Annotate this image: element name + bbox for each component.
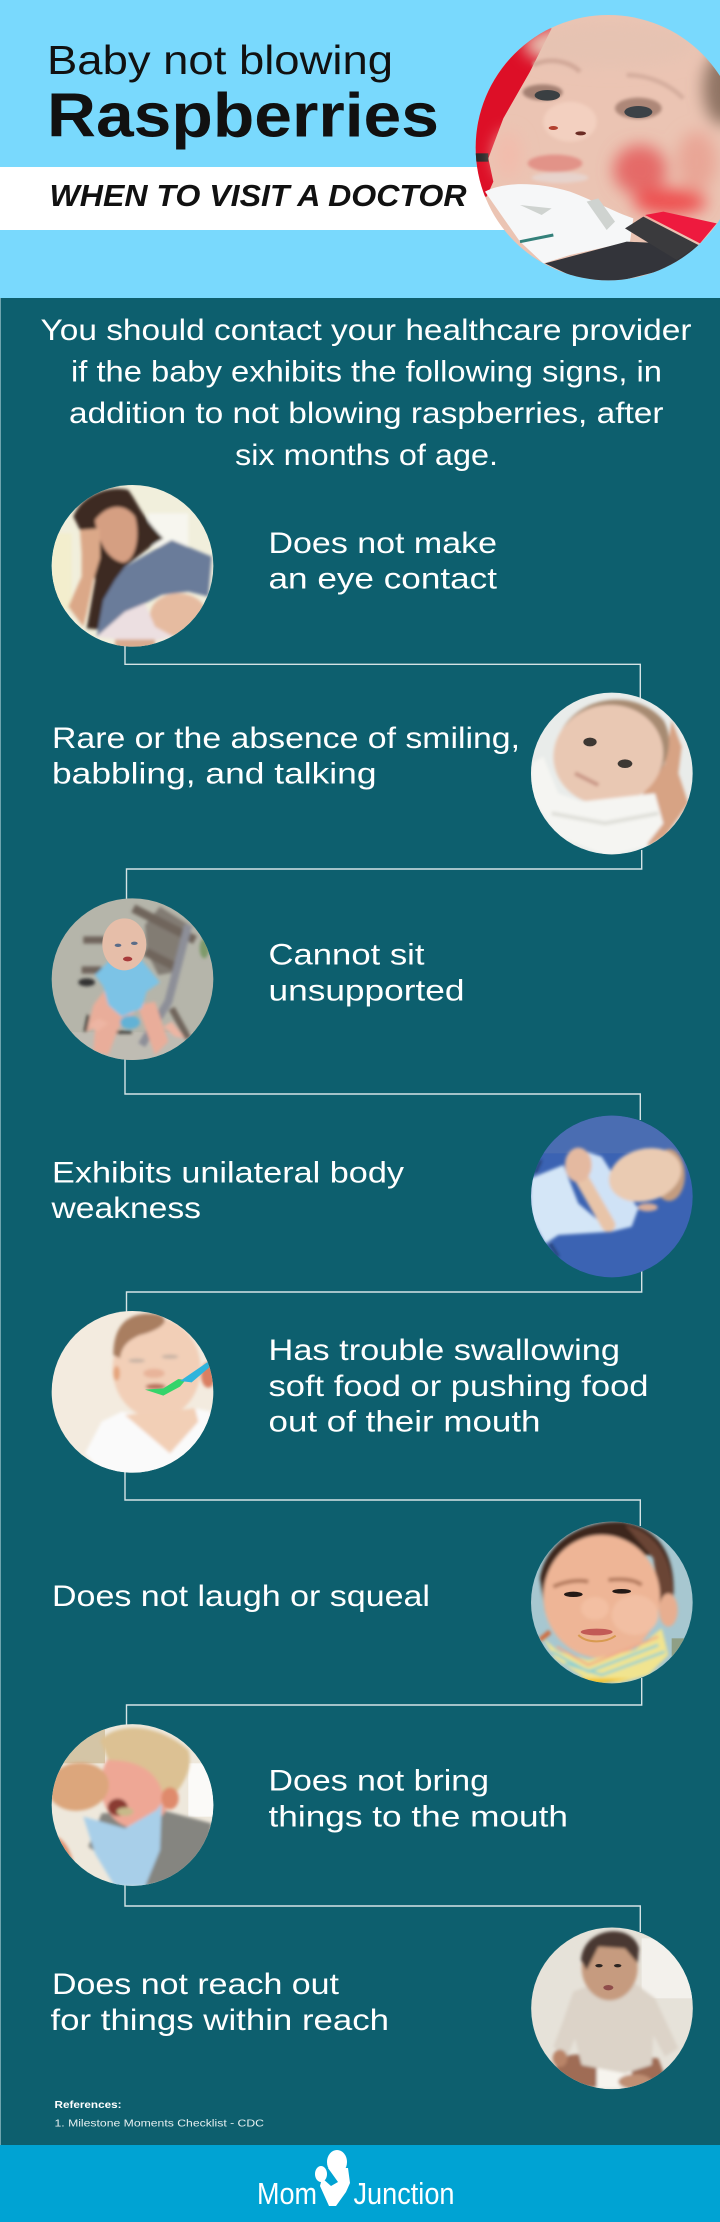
item 1 <box>45 480 497 655</box>
photo: tired mother holding baby <box>52 485 214 647</box>
text: Exhibits unilateral body <box>52 1156 404 1189</box>
text <box>268 527 497 596</box>
photo: newborn in white wrap <box>531 692 693 854</box>
subtitle: WHEN TO VISIT A DOCTOR <box>50 178 467 213</box>
photo: baby sitting in white bodysuit <box>531 1928 693 2090</box>
intro text: six months of age. <box>235 439 498 472</box>
text: Does not reach out <box>52 1968 339 2001</box>
references: References: <box>54 2099 122 2111</box>
white banner <box>0 167 560 230</box>
text: Does not bring <box>268 1765 489 1798</box>
text <box>50 1968 389 2037</box>
item 4 <box>50 1110 700 1285</box>
photo: toddler crying while fed <box>52 1724 214 1886</box>
logo: MomJunction <box>257 2150 454 2211</box>
footer bar <box>0 2145 720 2222</box>
text: Cannot sit <box>268 939 424 972</box>
title: Raspberries <box>47 82 439 151</box>
item 3 <box>45 895 464 1070</box>
text: babbling, and talking <box>52 758 376 791</box>
title <box>47 37 439 151</box>
text: Does not laugh or squeal <box>52 1580 430 1613</box>
item 8 <box>50 1925 702 2100</box>
text: Does not make <box>268 527 497 560</box>
intro text: You should contact your healthcare provider <box>40 314 691 347</box>
references <box>54 2099 264 2130</box>
photo: baby refusing spoon <box>52 1311 214 1473</box>
icon: mother and baby silhouette <box>315 2150 350 2206</box>
text: things to the mouth <box>268 1801 568 1834</box>
item 7 <box>45 1720 568 1895</box>
photo: baby lying on blue surface <box>531 1116 693 1278</box>
intro text: addition to not blowing raspberries, after <box>69 397 664 430</box>
text: weakness <box>50 1192 201 1225</box>
text: Rare or the absence of smiling, <box>52 722 520 755</box>
text: for things within reach <box>50 2004 389 2037</box>
logo: MomJunction: Junction <box>354 2176 454 2211</box>
photo: hero baby face <box>470 15 720 282</box>
intro text: if the baby exhibits the following signs, in <box>71 356 662 389</box>
text: an eye contact <box>268 563 497 596</box>
text <box>268 1765 568 1834</box>
text: out of their mouth <box>268 1406 540 1439</box>
item 5 <box>45 1305 648 1480</box>
text: Has trouble swallowing <box>268 1334 620 1367</box>
title: Baby not blowing <box>47 37 393 83</box>
header background <box>0 0 720 298</box>
photo: baby in blue onesie on chair <box>52 898 214 1060</box>
logo: MomJunction: Mom <box>257 2176 317 2211</box>
text: soft food or pushing food <box>268 1370 648 1403</box>
item 2 <box>52 690 700 865</box>
text <box>268 939 464 1007</box>
connector lines <box>125 640 642 1932</box>
photo: crying baby with striped bib <box>531 1522 693 1684</box>
text <box>268 1334 648 1439</box>
intro text <box>40 314 691 472</box>
item 6 <box>52 1515 702 1690</box>
references: 1. Milestone Moments Checklist - CDC <box>54 2118 264 2130</box>
text <box>52 722 520 791</box>
text <box>50 1156 404 1225</box>
text: unsupported <box>268 974 464 1007</box>
